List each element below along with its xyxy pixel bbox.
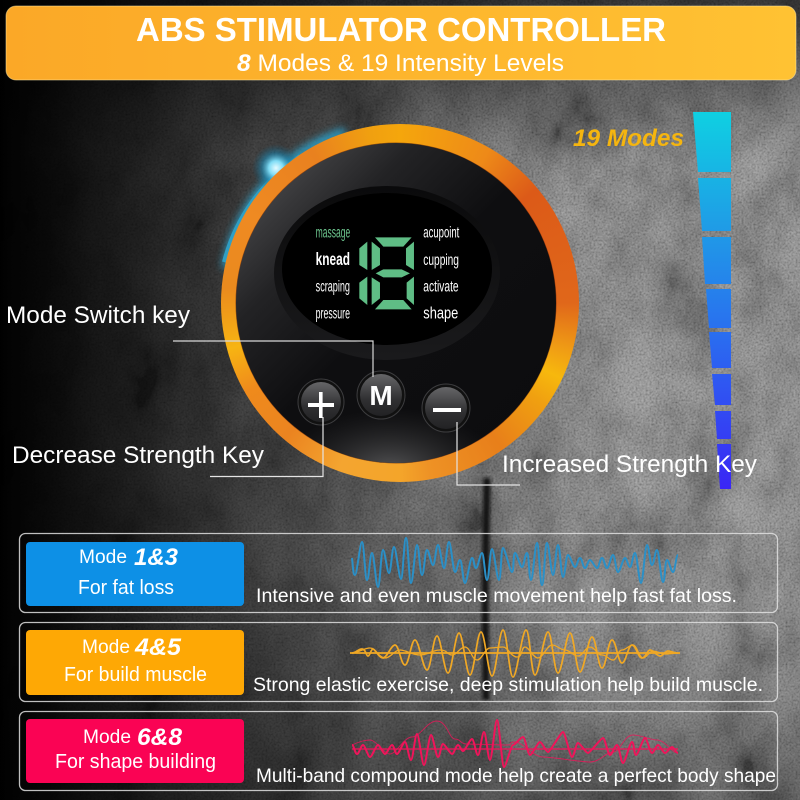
panel: fat loss (20, 534, 778, 612)
mode badge: 1&3: For fat loss (78, 577, 174, 599)
title banner (6, 6, 796, 80)
label: increased strength key: Increased Strength Key (502, 451, 757, 478)
mode names left: massage (316, 224, 350, 241)
mode names left: scraping (316, 278, 350, 295)
mode badge: 4&5 (26, 630, 244, 695)
label: decrease strength key: Decrease Strength Key (12, 442, 264, 469)
leader line: increase strength (457, 422, 520, 485)
mode badge: 1&3: Mode (79, 547, 127, 568)
mode names right: acupoint (423, 225, 460, 242)
leader line: decrease strength (210, 417, 323, 476)
mode names right (423, 225, 460, 322)
description: shape building: Multi-band compound mode help create a perfect body shape (256, 765, 776, 787)
waveform: pink (352, 720, 678, 767)
mode badge: 6&8 (26, 719, 244, 783)
mode badge: 1&3 (26, 542, 244, 606)
mode badge: 4&5: Mode (82, 637, 130, 658)
mode badge: 4&5: For build muscle (64, 664, 207, 686)
mode badge: 6&8: Mode (83, 727, 131, 748)
mode names right: activate (423, 278, 459, 295)
seven segment digit display (359, 237, 414, 309)
description: build muscle: Strong elastic exercise, deep stimulation help build muscle. (253, 674, 763, 696)
description: fat loss: Intensive and even muscle movement help fast fat loss. (256, 585, 737, 607)
mode badge: 1&3: 1&3 (134, 544, 179, 571)
mode badge: 6&8: 6&8 (137, 724, 183, 751)
mode names left (316, 224, 350, 322)
minus button (422, 384, 470, 432)
mode names left: knead (316, 249, 350, 269)
mode names left: pressure (316, 305, 350, 322)
subtitle: 8 Modes & 19 Intensity Levels (237, 50, 564, 77)
intensity level bars (693, 112, 731, 489)
waveform: blue (352, 538, 678, 587)
waveform: orange (350, 630, 680, 677)
M button: M (369, 380, 393, 411)
device outer orange ring (221, 124, 579, 482)
mode badge: 4&5: 4&5 (134, 634, 182, 661)
label: mode switch key: Mode Switch key (6, 302, 190, 329)
mode names right: cupping (423, 252, 459, 269)
mode badge: 6&8: For shape building (55, 751, 216, 773)
panel: build muscle (20, 622, 778, 702)
mode names right: shape (423, 303, 458, 322)
display screen (274, 186, 500, 360)
plus button (298, 379, 344, 425)
panel: shape building (20, 712, 778, 790)
leader line: mode switch (173, 341, 373, 377)
M button (357, 371, 405, 419)
device face (236, 142, 556, 464)
title heading: ABS STIMULATOR CONTROLLER (136, 11, 666, 48)
label: 19 modes: 19 Modes (573, 125, 684, 152)
